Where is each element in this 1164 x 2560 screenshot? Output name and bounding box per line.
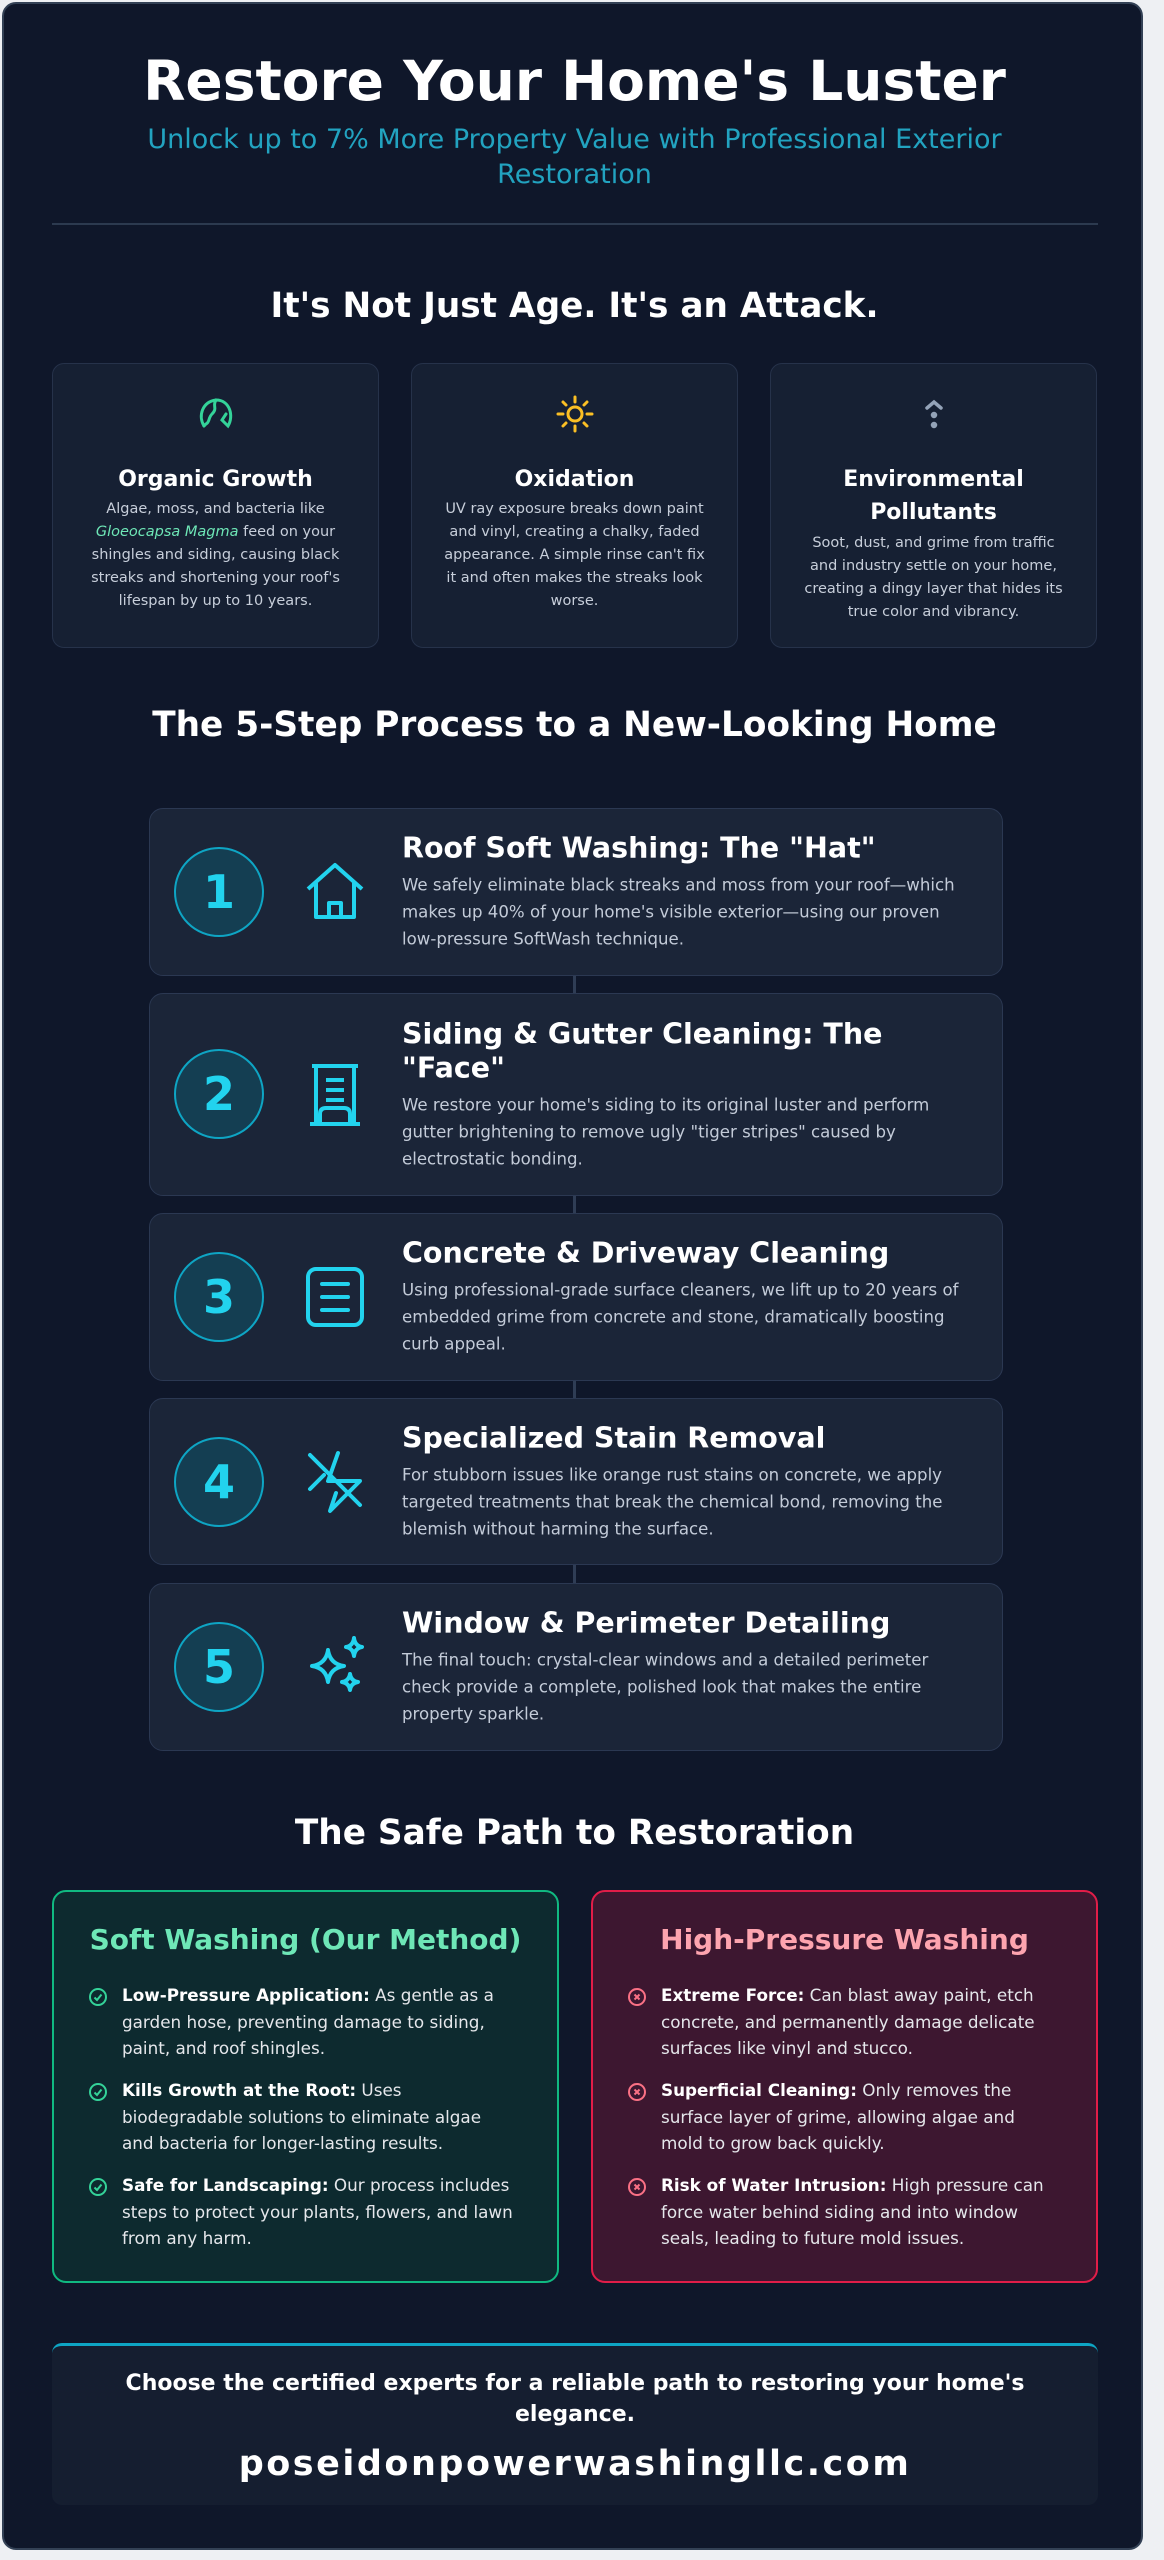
step 1: Roof Soft Washing: The "Hat" <box>402 832 876 864</box>
panel: pollutants: Pollutants <box>870 500 997 525</box>
step 2 <box>149 993 1003 1196</box>
step 2: "Face" <box>402 1051 505 1084</box>
step 1: 1 <box>203 865 235 919</box>
step 4: Specialized Stain Removal <box>402 1421 825 1454</box>
item: superficial: Superficial Cleaning: Only removes the surface layer of grime, allowing algae and mold to grow back quickly. <box>661 2080 1015 2153</box>
panel: organic growth: Algae, moss, and bacteria like Gloeocapsa Magma feed on your shingles and siding, causing black streaks and shortening your roof's lifespan by up to 10 years. <box>91 501 340 609</box>
panel: high pressure: High-Pressure Washing <box>660 1923 1029 1956</box>
panel: oxidation: Oxidation <box>515 467 634 492</box>
panel: high pressure <box>591 1890 1098 2283</box>
heading: safe path: The Safe Path to Restoration <box>295 1813 854 1853</box>
panel: pollutants: Environmental <box>843 467 1024 492</box>
callout: CTA: Choose the certified experts for a reliable path to restoring your home's elegance. <box>126 2371 1024 2427</box>
title: Restore Your Home's Luster <box>143 49 1006 113</box>
item: water intrusion: Risk of Water Intrusion: High pressure can force water behind siding and into window seals, leading to future mold issues. <box>661 2175 1044 2248</box>
heading: attack: It's Not Just Age. It's an Attack. <box>270 286 879 326</box>
panel: soft washing <box>52 1890 559 2283</box>
panel: oxidation: UV ray exposure breaks down paint and vinyl, creating a chalky, faded appearance. A simple rinse can't fix it and often makes the streaks look worse. <box>444 501 705 609</box>
callout: CTA: poseidonpowerwashingllc.com <box>239 2444 911 2484</box>
step 3: 3 <box>203 1270 235 1324</box>
panel: pollutants <box>770 363 1097 648</box>
step 5: The final touch: crystal-clear windows and a detailed perimeter check provide a complete, polished look that makes the entire property sparkle. <box>402 1650 928 1724</box>
step 5: 5 <box>203 1640 235 1694</box>
item: landscaping: Safe for Landscaping: Our process includes steps to protect your plants, flowers, and lawn from any harm. <box>122 2175 513 2248</box>
item: kills growth: Kills Growth at the Root: Uses biodegradable solutions to eliminate algae and bacteria for longer-lasting results. <box>122 2080 481 2153</box>
icon: siding <box>310 1064 360 1126</box>
icon: document <box>306 1267 364 1327</box>
step 3: Using professional-grade surface cleaners, we lift up to 20 years of embedded grime from concrete and stone, dramatically boosting curb appeal. <box>402 1280 958 1354</box>
step 3 <box>149 1213 1003 1381</box>
icon: algae <box>200 398 232 428</box>
icon: sun <box>556 396 594 432</box>
icon: house <box>306 862 364 919</box>
icon: stain removal <box>308 1451 362 1514</box>
heading: process: The 5-Step Process to a New-Looking Home <box>152 705 997 745</box>
step 3: Concrete & Driveway Cleaning <box>402 1236 889 1270</box>
item: extreme force: Extreme Force: Can blast away paint, etch concrete, and permanently damage delicate surfaces like vinyl and stucco. <box>661 1985 1035 2058</box>
panel: soft washing: Soft Washing (Our Method) <box>90 1923 521 1956</box>
step 5: Window & Perimeter Detailing <box>402 1606 890 1640</box>
step 1 <box>149 808 1003 976</box>
callout: CTA <box>52 2343 1098 2505</box>
step 2: We restore your home's siding to its original luster and perform gutter brightening to remove ugly "tiger stripes" caused by electrostatic bonding. <box>402 1095 929 1168</box>
step 4: For stubborn issues like orange rust stains on concrete, we apply targeted treatments that break the chemical bond, removing the blemish without harming the surface. <box>402 1465 942 1538</box>
step 2: 2 <box>203 1067 235 1121</box>
step 1: We safely eliminate black streaks and moss from your roof—which makes up 40% of your home's visible exterior—using our proven low-pressure SoftWash technique. <box>402 876 955 948</box>
step 4: 4 <box>203 1455 235 1509</box>
icon: sparkles <box>310 1636 364 1692</box>
panel: organic growth: Organic Growth <box>118 467 313 492</box>
step 4 <box>149 1398 1003 1565</box>
panel: organic growth <box>52 363 379 648</box>
step 5 <box>149 1583 1003 1751</box>
panel: oxidation <box>411 363 738 648</box>
item: low pressure: Low-Pressure Application: As gentle as a garden hose, preventing damage to siding, paint, and roof shingles. <box>122 1985 494 2058</box>
step 2: Siding & Gutter Cleaning: The <box>402 1017 882 1050</box>
icon: pollutants <box>925 400 943 428</box>
panel: pollutants: Soot, dust, and grime from traffic and industry settle on your home, creating a dingy layer that hides its true color and vibrancy. <box>804 535 1063 620</box>
subtitle: Unlock up to 7% More Property Value with Professional Exterior Restoration <box>147 124 1002 190</box>
